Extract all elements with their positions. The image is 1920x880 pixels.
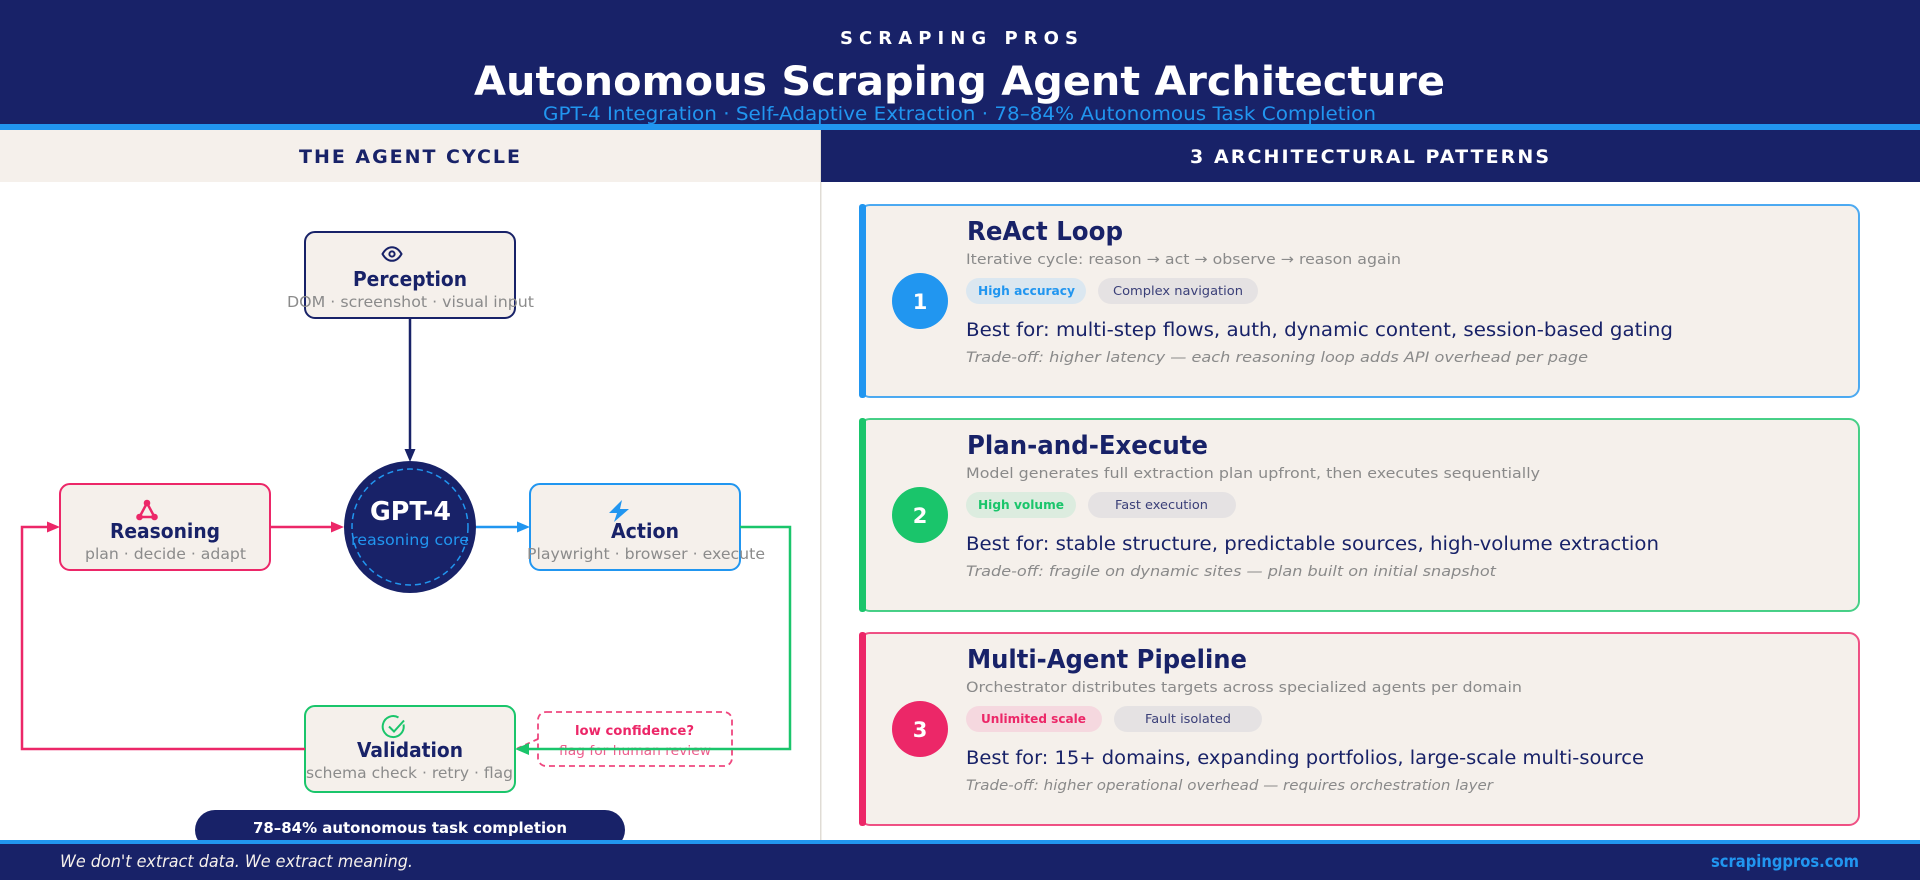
callout: low confidence: [516, 712, 732, 766]
chip: fault isolated: [1114, 706, 1262, 732]
panel heading: 3 architectural patterns: [821, 130, 1920, 182]
card: multi-agent pipeline: Trade-off: higher operational overhead — requires orchestration layer: [966, 778, 1494, 794]
card: react loop: Best for: multi-step flows, auth, dynamic content, session-based gating: [966, 320, 1673, 341]
node: reasoning: Reasoning: [110, 519, 220, 543]
node: gpt-4 core: reasoning core: [351, 531, 469, 549]
card: plan-and-execute: Model generates full extraction plan upfront, then executes sequentially: [966, 466, 1540, 482]
chip: fast execution: Fast execution: [1115, 497, 1208, 512]
arrow: reasoning to core: [270, 522, 344, 532]
number badge: [892, 701, 948, 757]
card: multi-agent pipeline: [859, 632, 1859, 826]
node: action: Playwright · browser · execute: [527, 545, 765, 563]
icon: network triangle: [136, 500, 158, 520]
card: plan-and-execute: [859, 418, 1859, 612]
icon: lightning bolt: [609, 500, 629, 522]
chip: high volume: High volume: [978, 497, 1064, 512]
card: react loop: ReAct Loop: [967, 217, 1123, 247]
subtitle: GPT-4 Integration · Self-Adaptive Extraction · 78–84% Autonomous Task Completion: [543, 103, 1376, 125]
footer: [0, 840, 1920, 880]
card: plan-and-execute: Plan-and-Execute: [967, 431, 1208, 461]
callout: low confidence: low confidence?: [575, 723, 694, 739]
panel: architectural patterns: [821, 130, 1920, 826]
node: gpt-4 core: [344, 461, 476, 593]
node: perception: DOM · screenshot · visual input: [287, 293, 534, 311]
icon: eye: [382, 247, 402, 261]
stat pill: 78–84% autonomous task completion: [253, 819, 567, 837]
icon: check circle: [383, 716, 404, 737]
chip: unlimited scale: [966, 706, 1102, 732]
panel: agent cycle: [0, 130, 822, 850]
node: validation: schema check · retry · flag: [306, 764, 513, 782]
node: validation: [305, 706, 515, 792]
node: reasoning: plan · decide · adapt: [85, 545, 246, 563]
card: react loop: [859, 204, 1859, 398]
card: plan-and-execute: Best for: stable structure, predictable sources, high-volume extraction: [966, 534, 1659, 555]
arrow: perception to core: [404, 318, 416, 462]
node: action: [527, 484, 765, 570]
number badge: [892, 487, 948, 543]
node: gpt-4 core: GPT-4: [370, 497, 451, 527]
card: multi-agent pipeline: Orchestrator distributes targets across specialized agents per domain: [966, 680, 1522, 696]
header: [0, 0, 1920, 125]
card: multi-agent pipeline: Best for: 15+ domains, expanding portfolios, large-scale multi-source: [966, 748, 1644, 769]
chip: complex navigation: [1098, 278, 1258, 304]
website: scrapingpros.com: [1711, 852, 1859, 871]
number badge: 1: [913, 290, 927, 314]
chip: high accuracy: High accuracy: [978, 283, 1075, 298]
node: validation: Validation: [357, 738, 463, 762]
card: multi-agent pipeline: Multi-Agent Pipeline: [967, 645, 1247, 675]
card: react loop: Trade-off: higher latency — each reasoning loop adds API overhead per page: [966, 350, 1588, 366]
arrow: action to validation: [515, 527, 790, 755]
arrow: core to action: [476, 522, 530, 532]
node: perception: Perception: [353, 267, 467, 291]
chip: complex navigation: Complex navigation: [1113, 283, 1243, 298]
number badge: [892, 273, 948, 329]
chip: high accuracy: [966, 278, 1086, 304]
tagline: We don't extract data. We extract meaning.: [60, 852, 413, 871]
panel heading: the agent cycle: [0, 130, 820, 182]
node: reasoning: [60, 484, 270, 570]
callout: low confidence: flag for human review: [559, 743, 711, 759]
chip: unlimited scale: Unlimited scale: [981, 711, 1086, 726]
title: Autonomous Scraping Agent Architecture: [474, 59, 1445, 105]
node: action: Action: [611, 519, 679, 543]
card: react loop: Iterative cycle: reason → act → observe → reason again: [966, 252, 1401, 268]
node: perception: [287, 232, 534, 318]
panel heading: the agent cycle: THE AGENT CYCLE: [299, 146, 520, 168]
chip: high volume: [966, 492, 1076, 518]
brand name: SCRAPING PROS: [840, 28, 1078, 49]
arrow: validation back to reasoning: [22, 522, 305, 749]
stat pill: [195, 810, 625, 850]
number badge: 3: [913, 718, 927, 742]
chip: fault isolated: Fault isolated: [1145, 711, 1231, 726]
card: plan-and-execute: Trade-off: fragile on dynamic sites — plan built on initial snapshot: [966, 564, 1497, 580]
panel heading: 3 architectural patterns: 3 ARCHITECTURAL PATTERNS: [1190, 146, 1549, 168]
chip: fast execution: [1088, 492, 1236, 518]
number badge: 2: [913, 504, 927, 528]
